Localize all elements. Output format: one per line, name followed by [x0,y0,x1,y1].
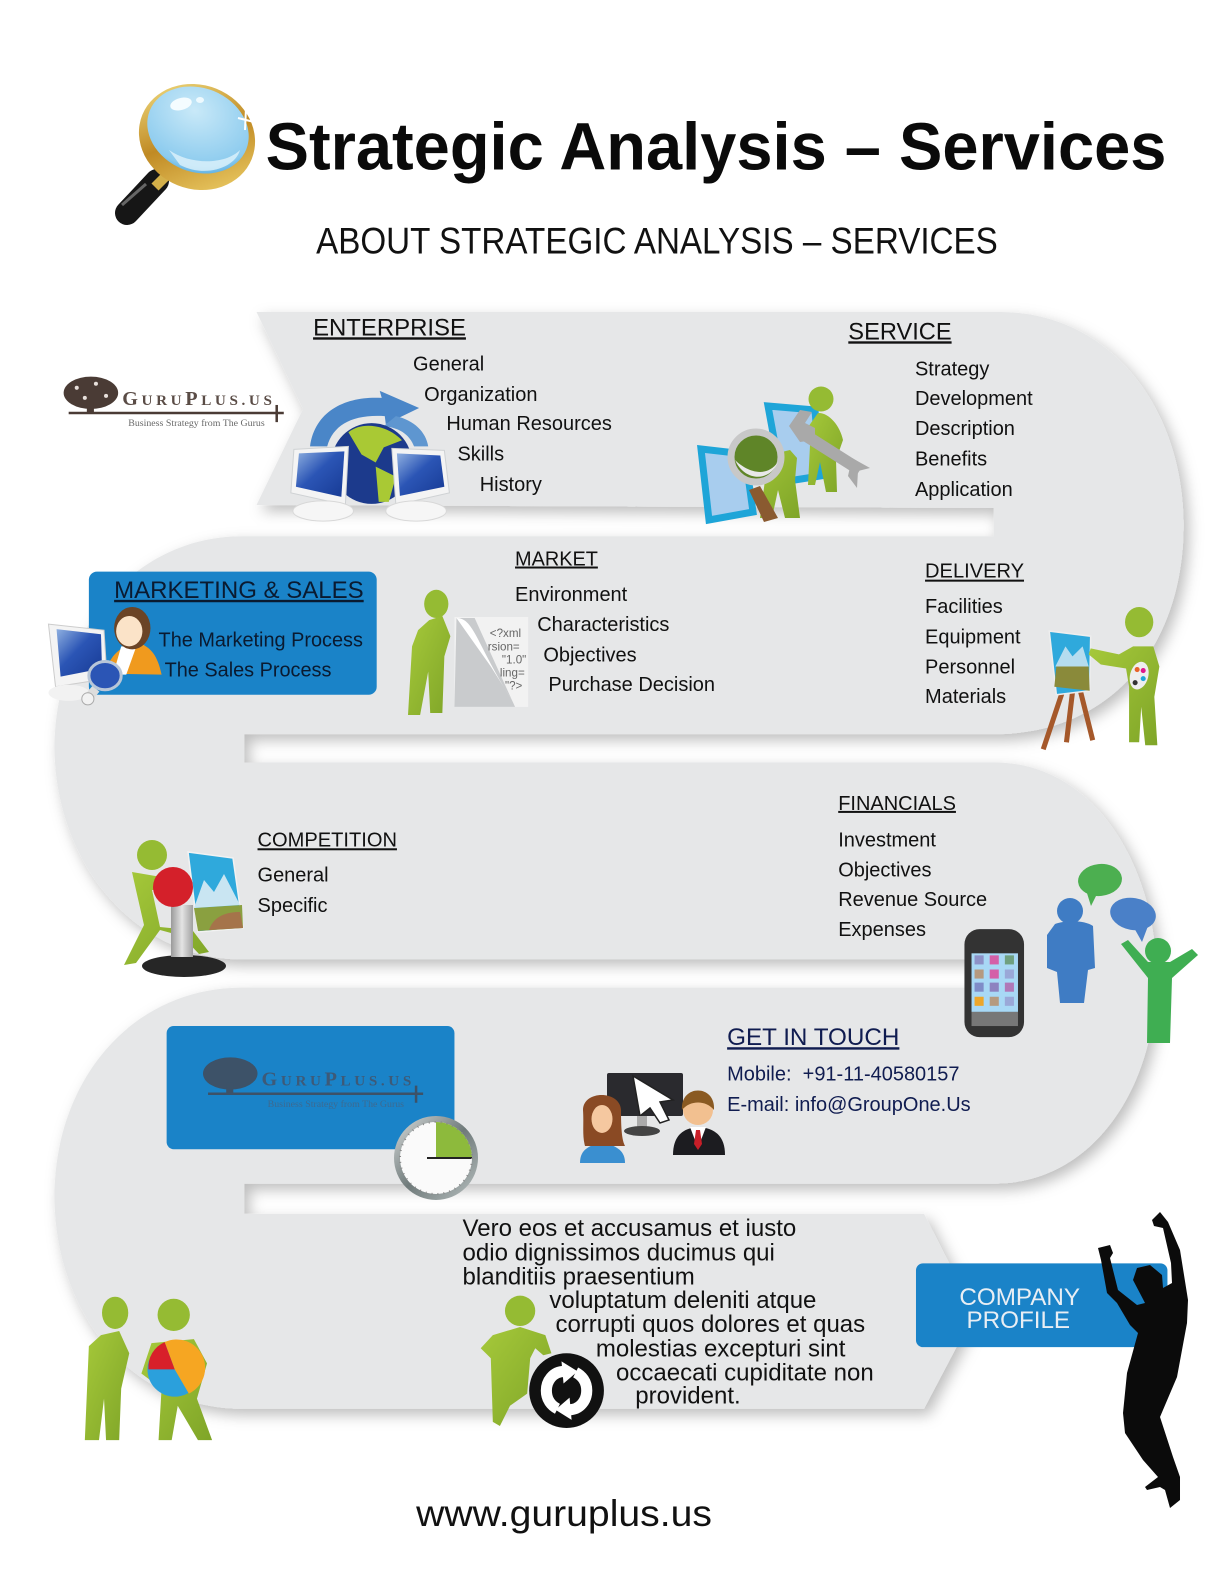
icon: blue person with speech bubble [1047,862,1124,1003]
icon: magnifying glass [122,67,271,213]
section: market: Environment [515,584,628,606]
icon: figure with joystick [124,840,243,977]
icon: XML document: "1.0" [502,653,526,666]
icon: support agent with monitor [48,607,162,705]
section: enterprise: Skills [457,444,504,466]
section: enterprise: ENTERPRISE [313,314,466,341]
section: financials: Expenses [838,919,926,941]
section: get in touch: Mobile: +91-11-40580157 [727,1064,960,1086]
icon: figures with magnifier and wrench [701,386,870,522]
panel: marketing and sales: The Sales Process [165,660,331,682]
icon: XML document: <?xml [490,627,521,640]
panel: marketing and sales: MARKETING & SALES [114,577,364,604]
section: service: Description [915,418,1015,440]
footer url: www.guruplus.us [415,1492,712,1534]
section: delivery: DELIVERY [925,561,1024,583]
section: financials [838,793,987,941]
icon: two green figures with pie chart [85,1297,212,1440]
icon: XML document [454,617,528,707]
section: service: Development [915,388,1033,410]
section: service: Benefits [915,449,987,471]
text block: lorem paragraph: odio dignissimos ducimus qui [463,1239,775,1266]
icon: painter figure at easel [1043,607,1159,749]
section: competition [258,829,397,917]
icon: XML document: rsion= [488,640,520,653]
section: market [515,549,715,696]
panel: marketing and sales: The Marketing Process [159,629,363,651]
icon: thinking figure [408,590,450,715]
icon: globe with monitors [291,391,449,521]
icon: green person with speech bubble [1108,894,1198,1043]
panel: company profile button [916,1263,1167,1347]
icon: XML document: "?> [505,680,523,693]
section: delivery: Materials [925,686,1006,708]
section: delivery [925,561,1024,708]
section: competition: General [258,865,329,887]
panel: company profile button: PROFILE [966,1307,1070,1334]
icon: cheering silhouette [1098,1212,1188,1508]
panel: serpentine grey band [55,312,1184,1409]
text block: lorem paragraph: molestias excepturi sint [596,1335,846,1362]
panel: logo box: Business Strategy from The Gurus [268,1099,404,1110]
text block: lorem paragraph: voluptatum deleniti atque [549,1287,816,1314]
panel: logo box: GURUPLUS.US [262,1069,415,1091]
section: get in touch [727,1024,971,1116]
section: competition: Specific [258,895,328,917]
section: market: Objectives [543,644,637,666]
icon: clock [394,1116,478,1200]
section: service: SERVICE [848,319,952,345]
section: delivery: Equipment [925,626,1021,648]
panel: marketing and sales [89,572,377,695]
title: Strategic Analysis – Services [266,111,1166,185]
section: enterprise: History [480,474,542,496]
section: enterprise: Organization [424,384,537,406]
section: service: Strategy [915,359,989,381]
icon: smartphone [964,929,1024,1037]
icon: team at computer [580,1073,725,1163]
section: market: MARKET [515,549,598,571]
section: enterprise [313,314,612,496]
section: service: Application [915,479,1013,501]
section: financials: Objectives [838,860,932,882]
logo: GuruPlus top [64,377,284,429]
text block: lorem paragraph: corrupti quos dolores et quas [555,1311,865,1338]
section: financials: Revenue Source [838,889,987,911]
section: delivery: Facilities [925,596,1003,618]
panel: company profile button: COMPANY [959,1284,1080,1311]
text block: lorem paragraph: provident. [635,1383,741,1410]
text block: lorem paragraph: occaecati cupiditate non [616,1360,874,1387]
icon: figure with refresh button [481,1296,604,1428]
section: market: Characteristics [537,614,669,636]
section: delivery: Personnel [925,657,1015,679]
text block: lorem paragraph: Vero eos et accusamus et iusto [463,1215,796,1242]
panel: logo box [167,1026,454,1149]
icon: XML document: ling= [500,667,525,680]
logo: GuruPlus top: GURUPLUS.US [122,388,276,410]
section: get in touch: GET IN TOUCH [727,1024,899,1051]
logo: GuruPlus top: Business Strategy from The Gurus [128,418,265,429]
subtitle: ABOUT STRATEGIC ANALYSIS – SERVICES [316,220,998,261]
text block: lorem paragraph: blanditiis praesentium [463,1264,695,1291]
section: financials: Investment [838,829,936,851]
section: service [848,319,1033,501]
section: get in touch: E-mail: info@GroupOne.Us [727,1094,971,1116]
section: market: Purchase Decision [548,674,715,696]
text block: lorem paragraph [463,1215,874,1410]
section: competition: COMPETITION [258,829,397,851]
section: financials: FINANCIALS [838,793,956,815]
section: enterprise: Human Resources [446,413,612,435]
section: enterprise: General [413,354,484,376]
